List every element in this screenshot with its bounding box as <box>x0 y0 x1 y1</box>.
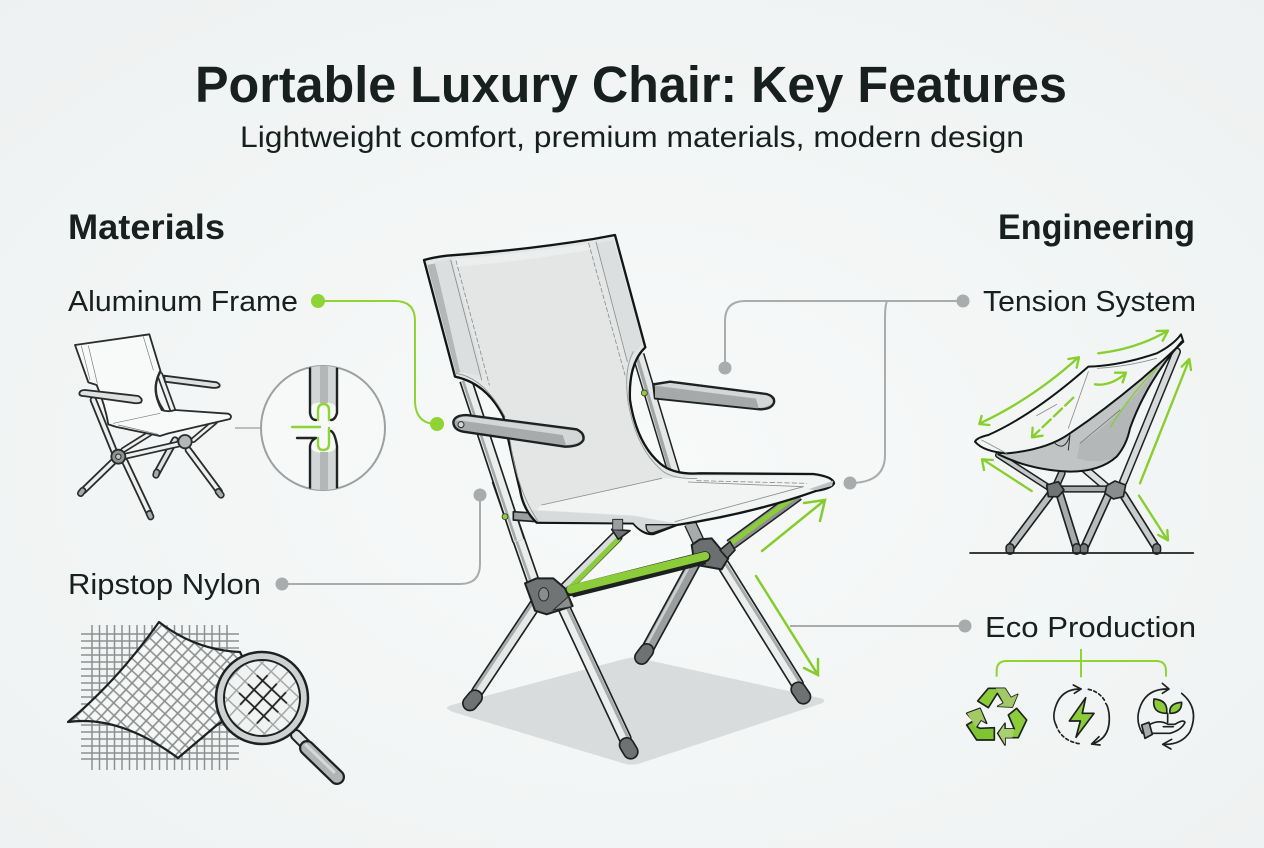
tension arrows <box>979 331 1191 540</box>
stitching <box>451 242 807 522</box>
callout line: aluminum frame <box>311 294 444 431</box>
small chair illustration <box>75 334 231 517</box>
chair base: legs, struts and shadow <box>447 480 824 765</box>
seat surface <box>537 476 832 523</box>
heading: materials: Materials <box>68 208 225 247</box>
rear right leg <box>642 562 695 657</box>
ground line <box>970 550 1193 555</box>
cutout over rear upright <box>630 347 660 463</box>
rear upright <box>638 355 674 473</box>
detail circle: aluminum joint <box>261 360 385 495</box>
callout line: tension system <box>718 294 970 490</box>
seat front lip <box>530 510 677 533</box>
small chair hinges <box>111 450 125 464</box>
tension system chair illustration <box>970 331 1193 553</box>
left armrest <box>453 415 584 447</box>
tube segments <box>310 366 337 407</box>
floor shadow <box>447 657 824 765</box>
shell seat <box>975 334 1183 453</box>
arrow: seat tension <box>762 500 825 551</box>
small chair feet <box>81 472 221 517</box>
green pivot dots <box>641 390 647 396</box>
small chair fabric <box>75 334 231 436</box>
strut cap <box>612 529 630 539</box>
front right leg <box>723 565 803 697</box>
icon: sustainable hand and plant <box>1138 683 1194 749</box>
rear left leg <box>470 603 535 703</box>
label: eco production: Eco Production <box>985 612 1196 644</box>
right hinge <box>692 538 735 569</box>
right armrest <box>653 382 774 409</box>
side shading <box>427 263 462 373</box>
icon: renewable energy <box>1054 685 1109 745</box>
leader line to detail <box>235 427 262 429</box>
icon: recycling <box>967 688 1027 745</box>
front left leg <box>565 610 631 752</box>
green seat strut right <box>730 495 798 545</box>
fabric back and seat <box>424 235 834 534</box>
callout line: eco production <box>790 620 972 632</box>
green spring clip <box>292 404 329 450</box>
ripstop nylon illustration <box>68 622 337 777</box>
side view hinges <box>1047 482 1064 497</box>
upright tube <box>498 480 533 582</box>
rear post <box>690 523 699 543</box>
heading: engineering: Engineering <box>998 208 1195 247</box>
title: Portable Luxury Chair: Key Features <box>195 56 1067 113</box>
left upright <box>466 380 519 541</box>
green crossbar <box>571 556 705 593</box>
shell underside <box>998 338 1182 472</box>
magnifying glass handle <box>296 735 337 777</box>
small chair right arm <box>164 376 220 388</box>
label: aluminum frame: Aluminum Frame <box>68 286 298 318</box>
magnifying glass lens <box>216 652 308 744</box>
shell outline <box>998 342 1182 472</box>
chair top: back, seat and armrests <box>424 235 834 541</box>
side view frame <box>998 352 1177 550</box>
label: ripstop nylon: Ripstop Nylon <box>68 569 261 601</box>
small chair legs <box>83 375 219 513</box>
fabric swatch <box>68 622 262 758</box>
callout line: ripstop nylon <box>276 488 486 590</box>
label: tension system: Tension System <box>983 286 1196 318</box>
arrow: leg extension <box>756 576 818 675</box>
left hinge <box>525 578 573 614</box>
main chair illustration <box>424 235 834 765</box>
green seat strut left <box>563 537 618 592</box>
subtitle: Lightweight comfort, premium materials, modern design <box>240 121 1024 154</box>
eco production bracket <box>997 649 1166 677</box>
shell seams <box>982 358 1157 453</box>
seat rail <box>513 512 537 522</box>
small chair left arm <box>79 390 142 403</box>
fabric background grid <box>81 625 239 770</box>
